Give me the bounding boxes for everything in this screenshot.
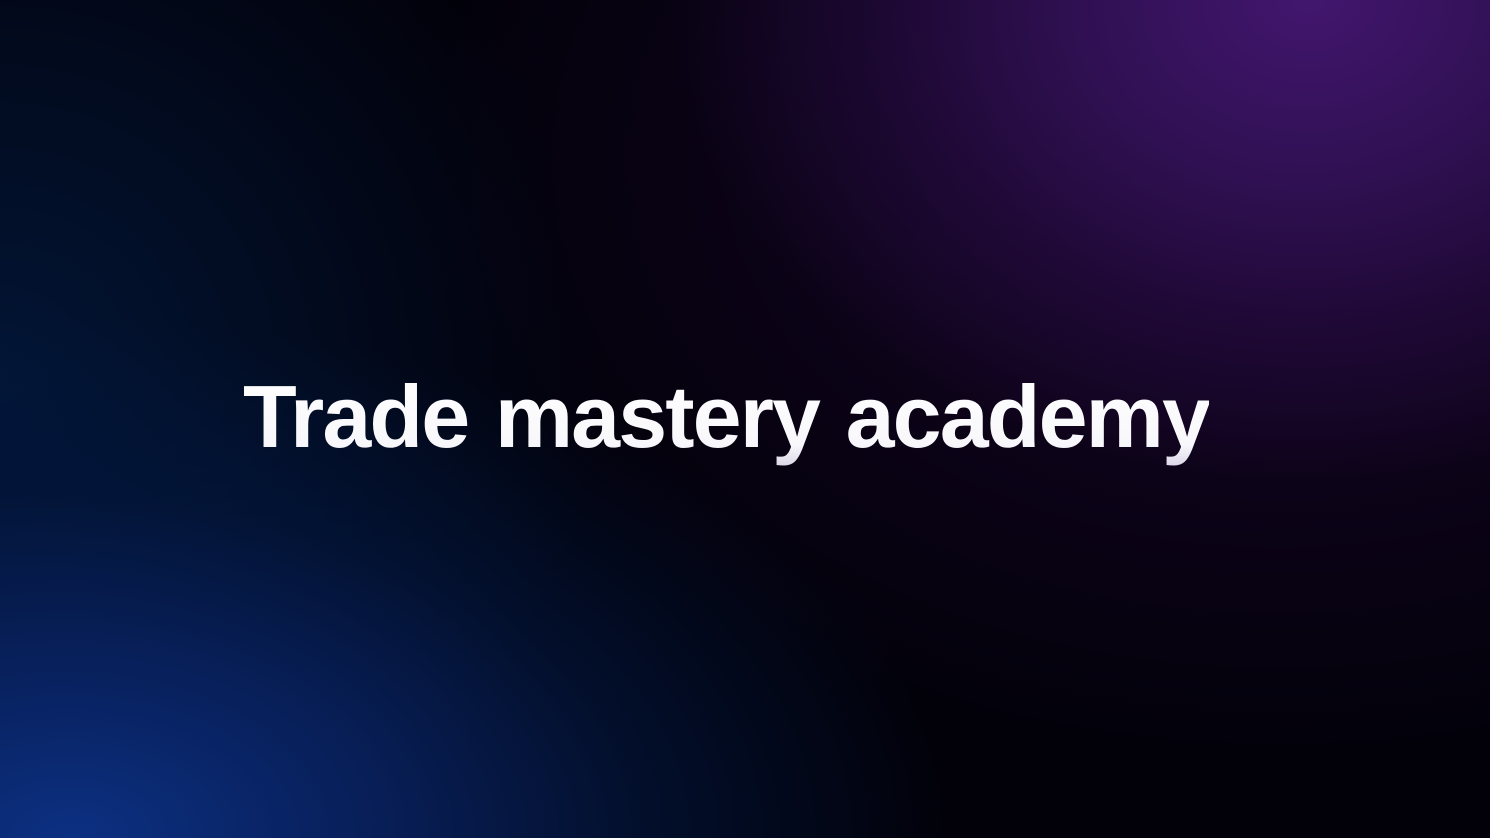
- title: Trade mastery academy: [243, 367, 1209, 466]
